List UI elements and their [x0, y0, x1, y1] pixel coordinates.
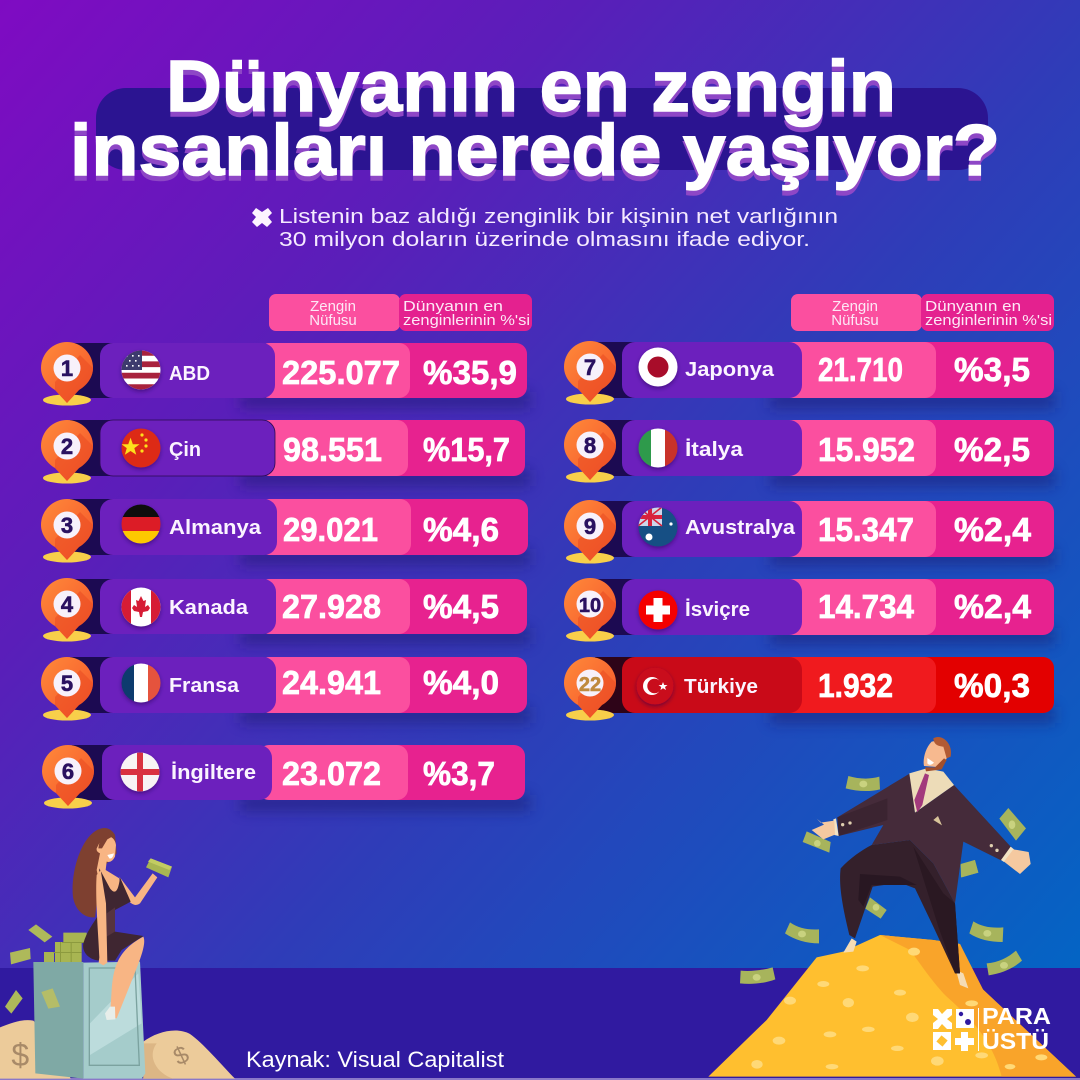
- left table header: Dünyanın en: [403, 298, 503, 315]
- row 3: Almanya: %4,6: [423, 511, 499, 548]
- head: [924, 741, 948, 767]
- row 10: İsviçre: 10: [579, 595, 601, 617]
- row 22: Türkiye: Türkiye: [684, 676, 758, 698]
- row 2: Çin: 98.551: [283, 431, 382, 468]
- row 7: Japonya: %3,5: [954, 351, 1030, 388]
- lower arm: [96, 870, 107, 965]
- row 4: Kanada: %4,5: [423, 588, 499, 625]
- pocket square: [933, 816, 942, 825]
- title: Dünyanın en zengin: [166, 47, 896, 127]
- row 10: İsviçre: [564, 578, 1054, 642]
- source note: Kaynak: Visual Capitalist: [246, 1047, 504, 1072]
- row 8: İtalya: 15.952: [818, 431, 915, 468]
- row 8: İtalya: [564, 419, 1054, 482]
- left table header: zenginlerinin %'si: [403, 312, 530, 329]
- flag: Switzerland: [638, 590, 678, 630]
- row 3: Almanya: 3: [61, 513, 73, 538]
- row 7: Japonya: Japonya: [685, 359, 775, 381]
- row 10: İsviçre: 14.734: [818, 588, 915, 625]
- row 9: Avustralya: 9: [584, 514, 596, 539]
- row 9: Avustralya: Avustralya: [685, 517, 796, 539]
- bill behind him on the right: [961, 860, 978, 877]
- row 2: Çin: Çin: [169, 439, 201, 461]
- row shadows: [240, 392, 1055, 811]
- row 6: İngiltere: İngiltere: [171, 761, 256, 784]
- row 7: Japonya: [564, 341, 1054, 404]
- logo icon tiles: [933, 1009, 952, 1029]
- left table header: [269, 294, 532, 331]
- man figure: [812, 737, 1031, 973]
- hair: [73, 828, 117, 917]
- row 6: İngiltere: 6: [62, 759, 74, 784]
- row 1: ABD: 1: [61, 356, 73, 381]
- feet: [843, 938, 857, 953]
- flag: USA: [121, 350, 161, 390]
- raised arm: [119, 873, 157, 905]
- row 2: Çin: %15,7: [423, 431, 510, 468]
- row 1: ABD: 225.077: [282, 354, 400, 391]
- flag: France: [121, 663, 161, 703]
- left table header: Nüfusu: [309, 312, 357, 329]
- flying bills behind: [846, 776, 880, 791]
- row 5: Fransa: Fransa: [169, 675, 240, 697]
- right table header: Nüfusu: [831, 312, 879, 329]
- row 22: Türkiye: 22: [579, 674, 601, 696]
- flag: China: [121, 428, 161, 468]
- row 6: İngiltere: 23.072: [282, 755, 381, 792]
- left table header: Zengin: [310, 298, 356, 315]
- row 22: Türkiye: 1.932: [818, 667, 893, 704]
- right table header: zenginlerinin %'si: [925, 312, 1052, 329]
- title: [70, 47, 1000, 196]
- row 22: Türkiye: [564, 657, 1054, 720]
- row 6: İngiltere: %3,7: [423, 755, 495, 792]
- trousers: [840, 840, 960, 973]
- leg: [110, 937, 144, 1018]
- illustration: woman on safe with money: $: [11, 1037, 29, 1073]
- row 9: Avustralya: 15.347: [818, 511, 914, 548]
- face and chest: [97, 836, 121, 894]
- illustration: woman on safe with money: [0, 828, 235, 1079]
- row 2: Çin: 2: [61, 434, 73, 459]
- flag: Australia: [638, 507, 678, 547]
- row 9: Avustralya: %2,4: [954, 511, 1032, 548]
- flag: England: [120, 752, 160, 792]
- row 5: Fransa: %4,0: [423, 664, 499, 701]
- right table header: Zengin: [832, 298, 878, 315]
- flying bills: [28, 924, 52, 942]
- flag: Turkey: [636, 668, 674, 704]
- subtitle note: Listenin baz aldığı zenginlik bir kişinin net varlığının: [279, 206, 838, 228]
- row 4: Kanada: 4: [61, 592, 74, 617]
- dress: [83, 868, 143, 961]
- illustration: gold pile with man: [708, 737, 1076, 1077]
- row 8: İtalya: İtalya: [685, 438, 744, 461]
- right table header: [791, 294, 1054, 331]
- money in hand: [146, 858, 172, 877]
- row 5: Fransa: 5: [61, 671, 73, 696]
- right table header: Dünyanın en: [925, 298, 1021, 315]
- row 1: ABD: ABD: [169, 363, 210, 385]
- logo: Para Üstü: ÜSTÜ: [982, 1028, 1049, 1054]
- flag: Italy: [638, 428, 678, 468]
- row 3: Almanya: Almanya: [169, 517, 262, 539]
- gold pile: [708, 935, 1076, 1077]
- row 6: İngiltere: [42, 745, 525, 808]
- row 1: ABD: %35,9: [423, 354, 517, 391]
- row 2: Çin: [41, 420, 525, 484]
- row 1: ABD: [41, 342, 527, 406]
- row 10: İsviçre: İsviçre: [685, 598, 750, 621]
- flag: Japan: [638, 347, 678, 387]
- row 10: İsviçre: %2,4: [954, 588, 1032, 625]
- safe: [33, 962, 83, 1079]
- row 5: Fransa: [41, 657, 527, 720]
- woman figure: [73, 828, 172, 1020]
- illustration: woman on safe with money: $: [169, 1041, 194, 1071]
- logo: Para Üstü: PARA: [982, 1003, 1051, 1029]
- title: Dünyanın en zengin: [166, 52, 896, 132]
- logo: Para Üstü: [933, 1003, 1051, 1054]
- row 8: İtalya: %2,5: [954, 431, 1030, 468]
- title backing pill: [96, 88, 988, 170]
- row 4: Kanada: [41, 578, 527, 642]
- money stack: [44, 933, 87, 962]
- shirt and tie: [909, 768, 954, 813]
- row 3: Almanya: 29.021: [283, 511, 378, 548]
- subtitle note: [252, 206, 838, 251]
- row 9: Avustralya: [564, 500, 1054, 564]
- icon: asterisk cross: [252, 208, 272, 227]
- hands and cuffs: [833, 818, 839, 836]
- subtitle note: 30 milyon doların üzerinde olmasını ifade ediyor.: [279, 229, 810, 251]
- flag: Germany: [121, 504, 161, 544]
- title: insanları nerede yaşıyor?: [70, 116, 1000, 196]
- row 7: Japonya: 7: [584, 355, 596, 380]
- title: insanları nerede yaşıyor?: [70, 111, 1000, 191]
- row 4: Kanada: Kanada: [169, 597, 249, 619]
- row 4: Kanada: 27.928: [282, 588, 381, 625]
- flag: Canada: [121, 587, 161, 627]
- jacket: [837, 773, 1011, 903]
- row 22: Türkiye: %0,3: [954, 667, 1030, 704]
- row 3: Almanya: [41, 499, 528, 562]
- row 5: Fransa: 24.941: [282, 664, 381, 701]
- money bags: [0, 1020, 71, 1079]
- row 8: İtalya: 8: [584, 433, 596, 458]
- row 7: Japonya: 21.710: [818, 351, 903, 388]
